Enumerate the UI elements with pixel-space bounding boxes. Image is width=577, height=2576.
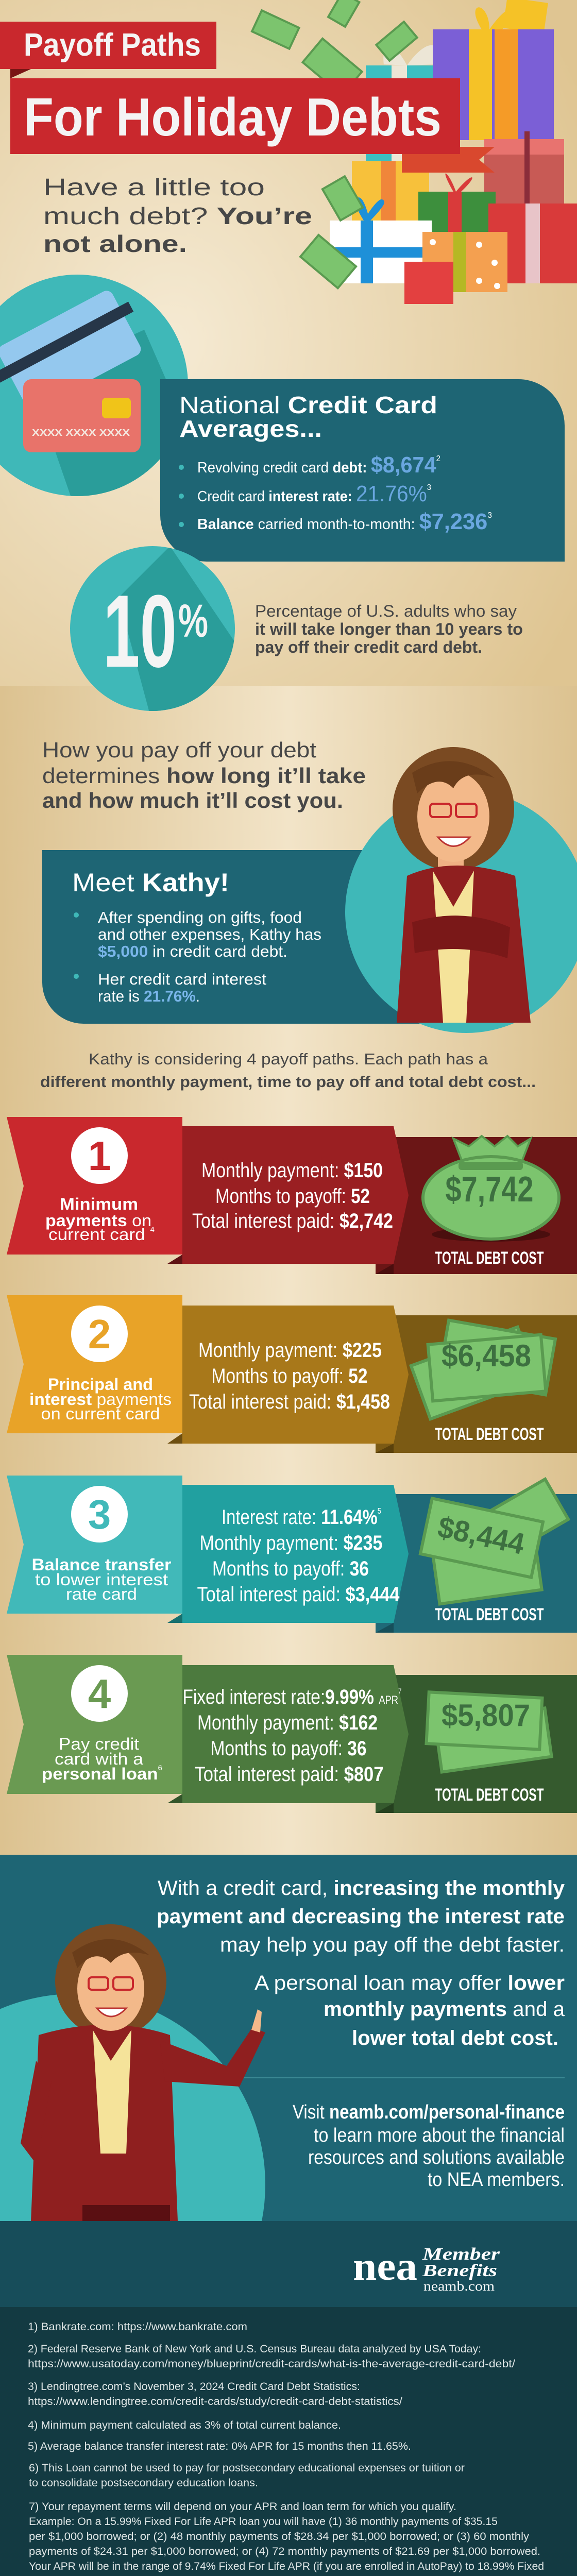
panel: path 2 principal and interest — [7, 1295, 577, 1453]
panel: path 4 personal loan — [7, 1655, 577, 1813]
panel: national credit card averages: Balance carried month-to-month: $7,236 — [197, 509, 488, 534]
text: 10% description — [255, 602, 523, 656]
panel: meet kathy: After spending on gifts, food — [98, 908, 302, 926]
panel: path 3 balance transfer: 3 — [88, 1492, 111, 1537]
footnotes: per $1,000 borrowed; or (2) 48 monthly payments of $28.34 per $1,000 borrowed; or (3) 60 monthly — [29, 2531, 530, 2543]
icon: money bills — [427, 1692, 552, 1772]
panel: path 3 balance transfer: Months to payoff: 36 — [212, 1557, 369, 1580]
panel: path 1 minimum payments — [7, 1117, 577, 1274]
panel: national credit card averages: 3 — [487, 511, 492, 520]
panel: path 2 principal and interest: Months to payoff: 52 — [211, 1365, 368, 1387]
logo: NEA Member Benefits: nea — [353, 2244, 417, 2289]
text: 10% description: Percentage of U.S. adults who say — [255, 602, 517, 620]
panel: path 3 balance transfer: Total interest paid: $3,444 — [197, 1583, 400, 1606]
panel: path 4 personal loan: card with a — [55, 1750, 143, 1768]
footnotes: 4) Minimum payment calculated as 3% of total current balance. — [28, 2419, 341, 2431]
panel: path 2 principal and interest: $6,458 — [442, 1338, 531, 1373]
panel: path 3 balance transfer: to lower interest — [35, 1570, 168, 1589]
panel: path 1 minimum payments: Total interest paid: $2,742 — [192, 1210, 393, 1232]
footnotes: payments of $24.31 per $1,000 borrowed; or (4) 72 monthly payments of $21.69 per $1,000 borrowed. — [29, 2546, 540, 2557]
text: Kathy is considering: different monthly payment, time to pay off and total debt cost... — [40, 1073, 536, 1091]
subtitle — [43, 174, 312, 257]
heading: how you pay off: and how much it’ll cost you. — [42, 788, 343, 812]
panel: path 2 principal and interest: 2 — [88, 1311, 111, 1357]
footnotes: 7) Your repayment terms will depend on your APR and loan term for which you qualify. — [29, 2501, 456, 2513]
panel: conclusion: lower total debt cost. — [352, 2027, 558, 2049]
panel: path 4 personal loan: personal loan — [42, 1765, 158, 1783]
panel: path 3 balance transfer — [7, 1476, 577, 1633]
panel: path 4 personal loan: Monthly payment: $162 — [197, 1711, 378, 1734]
title: For Holiday Debts: For Holiday Debts — [24, 88, 442, 147]
panel: national credit card averages: 3 — [427, 483, 431, 492]
panel: national credit card averages: Revolving credit card debt: $8,674 — [197, 452, 440, 478]
footnotes: 3) Lendingtree.com’s November 3, 2024 Credit Card Debt Statistics: — [28, 2381, 360, 2393]
subtitle: much debt? You’re — [43, 202, 312, 229]
logo: NEA Member Benefits: Benefits — [422, 2261, 497, 2280]
panel: meet kathy: $5,000 in credit card debt. — [98, 942, 287, 960]
panel: path 3 balance transfer: Interest rate: 11.64% — [222, 1506, 390, 1529]
panel: conclusion: to NEA members. — [428, 2169, 565, 2191]
panel: meet kathy — [42, 850, 464, 1024]
panel: path 1 minimum payments: current card — [48, 1225, 137, 1244]
logo: NEA Member Benefits — [353, 2244, 500, 2294]
footnotes: 6) This Loan cannot be used to pay for postsecondary educational expenses or tuition or — [29, 2462, 465, 2474]
panel: path 4 personal loan: 7 — [398, 1687, 402, 1695]
panel: path 1 minimum payments: Months to payoff: 52 — [215, 1185, 370, 1208]
panel: conclusion: payment and decreasing the interest rate — [157, 1905, 565, 1928]
panel: path 4 personal loan: Total interest paid: $807 — [195, 1763, 383, 1786]
logo: NEA Member Benefits: Member — [422, 2245, 500, 2264]
panel: national credit card averages: Credit card interest rate: 21.76% — [197, 481, 433, 506]
illustration: Kathy pointing — [21, 1924, 265, 2221]
panel: conclusion: With a credit card, increasing the monthly — [158, 1877, 565, 1900]
icon: money bills — [420, 1479, 568, 1604]
heading: how you pay off: determines how long it’ll take — [42, 764, 366, 788]
heading: how you pay off: How you pay off your debt — [42, 738, 316, 762]
panel: meet kathy: rate is 21.76%. — [98, 987, 200, 1005]
footnotes: https://www.lendingtree.com/credit-cards/study/credit-card-debt-statistics/ — [28, 2396, 402, 2408]
text: Kathy is considering: Kathy is considering 4 payoff paths. Each path has a — [89, 1050, 488, 1068]
panel: path 3 balance transfer: 5 — [378, 1507, 381, 1516]
panel: path 4 personal loan: Fixed interest rate:9.99% APR — [182, 1686, 402, 1708]
footnotes: to consolidate postsecondary education loans. — [29, 2477, 258, 2489]
footnotes: 5) Average balance transfer interest rate: 0% APR for 15 months then 11.65%. — [28, 2441, 411, 2452]
illustration: gifts and money — [252, 0, 577, 304]
panel: path 4 personal loan: 4 — [88, 1671, 111, 1717]
panel: path 4 personal loan: $5,807 — [442, 1698, 530, 1733]
panel: path 2 principal and interest: Total interest paid: $1,458 — [189, 1391, 390, 1413]
footnotes: Example: On a 15.99% Fixed For Life APR loan you will have (1) 36 monthly payments of $35.15 — [29, 2516, 498, 2528]
heading: how you pay off — [42, 738, 366, 812]
panel: path 1 minimum payments: payments on — [45, 1211, 151, 1230]
panel: path 1 minimum payments: 1 — [88, 1133, 111, 1179]
footnotes: https://www.usatoday.com/money/blueprint/credit-cards/what-is-the-average-credit-card-debt/ — [28, 2358, 515, 2370]
panel: national credit card averages: National Credit Card — [179, 392, 437, 418]
panel: path 4 personal loan: 6 — [158, 1764, 162, 1772]
panel: path 2 principal and interest: Monthly payment: $225 — [198, 1339, 382, 1362]
background: top section — [0, 0, 577, 686]
text: 10% description: pay off their credit card debt. — [255, 638, 482, 656]
icon: money stack — [411, 1320, 555, 1419]
illustration: Kathy arms crossed — [345, 747, 577, 1033]
subtitle: not alone. — [43, 230, 187, 257]
icon: credit cards in circle — [0, 275, 188, 496]
panel: path 1 minimum payments: 4 — [150, 1225, 155, 1233]
panel: national credit card averages: Averages... — [179, 415, 322, 442]
icon: money bag — [423, 1136, 559, 1242]
panel: meet kathy: Meet Kathy! — [72, 868, 229, 897]
panel: path 2 principal and interest: Principal and — [48, 1375, 153, 1394]
logo: NEA Member Benefits: neamb.com — [423, 2279, 495, 2294]
footnotes — [0, 2307, 577, 2576]
panel: path 4 personal loan: Pay credit — [59, 1735, 139, 1753]
panel: path 4 personal loan: Months to payoff: 36 — [210, 1737, 367, 1760]
panel: path 3 balance transfer: Monthly payment: $235 — [200, 1532, 382, 1554]
stat: 10% — [70, 546, 235, 711]
panel: conclusion: monthly payments and a — [324, 1998, 565, 2021]
stat: 10%: 10 — [103, 574, 177, 689]
panel: national credit card averages — [160, 379, 565, 562]
text: 10% description: it will take longer than 10 years to — [255, 620, 523, 638]
panel: meet kathy: Her credit card interest — [98, 970, 266, 988]
panel: conclusion: may help you pay off the debt faster. — [220, 1934, 565, 1956]
title: For Holiday Debts — [10, 78, 495, 173]
panel: path 3 balance transfer: Balance transfer — [32, 1555, 171, 1574]
footnotes: 2) Federal Reserve Bank of New York and U.S. Census Bureau data analyzed by USA Today: — [28, 2343, 481, 2355]
panel: path 1 minimum payments: Minimum — [60, 1195, 138, 1213]
panel: path 3 balance transfer: rate card — [66, 1585, 137, 1603]
panel: conclusion: A personal loan may offer lower — [254, 1972, 565, 1994]
panel: national credit card averages: 2 — [436, 454, 440, 463]
logo band — [0, 2221, 577, 2307]
panel: path 2 principal and interest: on current card — [41, 1404, 160, 1423]
subtitle: Have a little too — [43, 174, 265, 200]
panel: path 2 principal and interest: interest payments — [29, 1390, 172, 1409]
icon: credit cards in circle: XXXX XXXX XXXX — [32, 428, 130, 438]
stat: 10%: % — [178, 596, 208, 647]
title: Payoff Paths — [0, 22, 216, 78]
title: Payoff Paths: Payoff Paths — [24, 27, 201, 63]
panel: conclusion — [0, 1855, 577, 2221]
panel: path 1 minimum payments: Monthly payment: $150 — [201, 1159, 383, 1182]
icon: money bag: $7,742 — [445, 1169, 534, 1209]
panel: meet kathy: and other expenses, Kathy has — [98, 925, 321, 943]
panel: path 3 balance transfer: $8,444 — [435, 1510, 528, 1561]
background: paths section — [0, 686, 577, 1855]
footnotes: 1) Bankrate.com: https://www.bankrate.com — [28, 2321, 247, 2333]
text: Kathy is considering — [40, 1050, 536, 1091]
footnotes: Your APR will be in the range of 9.74% Fixed For Life APR (if you are enrolled in AutoPay) to 18.99% Fixed — [29, 2561, 544, 2572]
